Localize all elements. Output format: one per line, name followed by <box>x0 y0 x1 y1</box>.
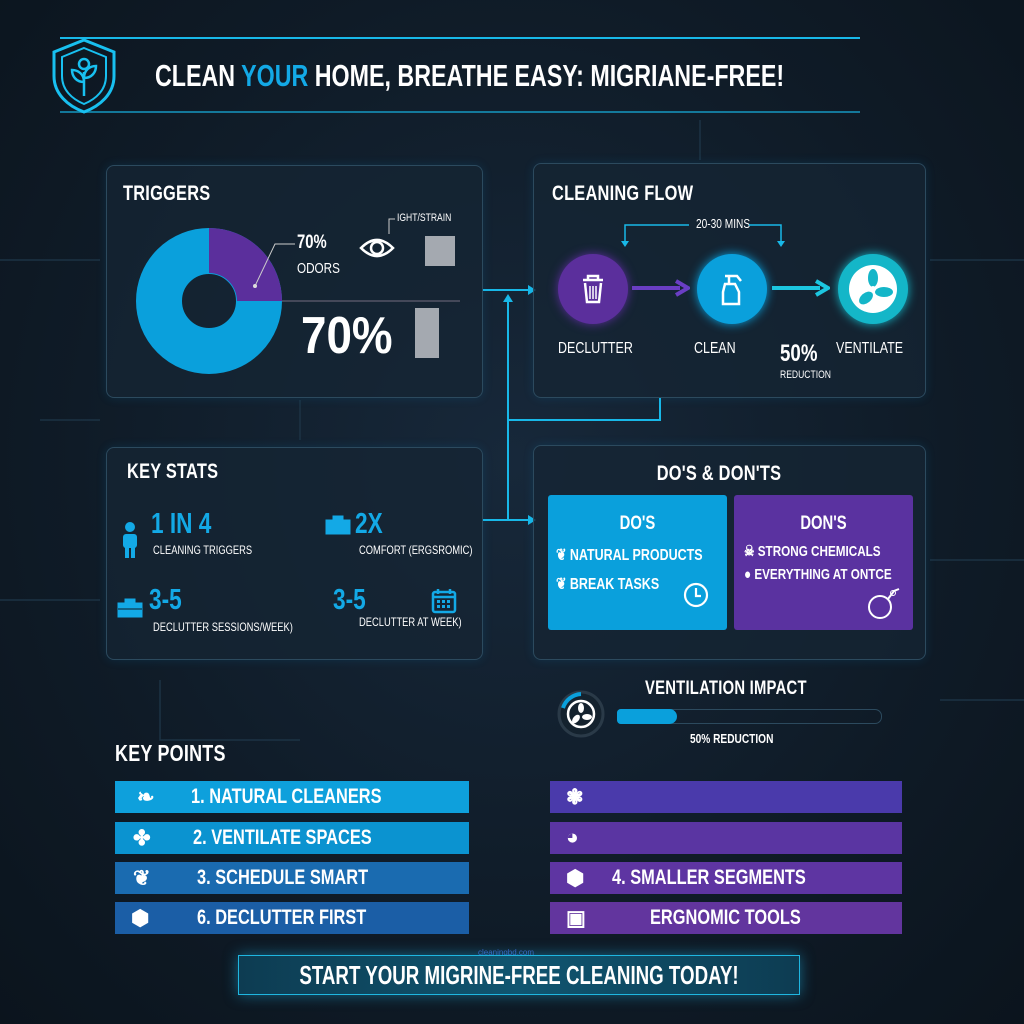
label: light/strain: IGHT/STRAIN <box>397 212 451 224</box>
panel: cleaning flow: REDUCTION <box>780 369 831 381</box>
donut chart <box>136 228 460 374</box>
ventilation impact: VENTILATION IMPACT <box>645 678 807 699</box>
arrow <box>772 279 830 297</box>
panel: cleaning flow: VENTILATE <box>836 340 903 357</box>
panel: cleaning flow: 50% <box>780 340 817 367</box>
key points list left: 2. VENTILATE SPACES <box>193 826 372 849</box>
box: do's: DO'S <box>620 513 655 534</box>
progress bar <box>617 709 882 724</box>
box: do's <box>548 495 727 630</box>
icon: fan gauge <box>558 690 604 738</box>
key points list right: ❃ <box>566 786 584 808</box>
stat: 2x: COMFORT (ERGSROMIC) <box>359 543 473 557</box>
panel: triggers: ODORS <box>297 260 340 277</box>
key points list right <box>550 781 902 934</box>
icon: clock <box>684 582 708 608</box>
key points list left: ❦ <box>133 866 151 890</box>
box: don'ts: ☠ STRONG CHEMICALS <box>744 543 881 560</box>
big stat: 70% <box>301 307 393 365</box>
key points list left: 1. NATURAL CLEANERS <box>191 785 382 808</box>
key points list left <box>115 781 469 934</box>
box: do's: ❦ BREAK TASKS <box>556 576 659 593</box>
ventilation impact: 50% REDUCTION <box>690 731 773 746</box>
labels: DECLUTTER <box>558 340 633 357</box>
key points list right: ◕ <box>566 826 579 849</box>
stat: 2x <box>326 508 473 557</box>
key points list right: 4. SMALLER SEGMENTS <box>612 866 806 889</box>
heading: triggers: TRIGGERS <box>123 182 210 205</box>
step: ventilate <box>838 254 908 324</box>
stat: 3-5 week: DECLUTTER AT WEEK) <box>359 615 462 629</box>
panel: cleaning flow <box>533 163 926 398</box>
timer label: 20-30 MINS <box>696 216 750 231</box>
stat: 2x: 2X <box>355 508 383 540</box>
step: declutter <box>558 254 628 324</box>
key points list right: ▣ <box>566 906 586 930</box>
box: don'ts: ● EVERYTHING AT ONTCE <box>744 566 892 583</box>
heading: DO'S & DON'TS <box>657 462 781 485</box>
panel: key stats <box>106 447 483 660</box>
key points list left: ⬢ <box>131 906 149 930</box>
stat: 1 in 4 <box>123 508 252 558</box>
step: clean <box>697 254 767 324</box>
call to action banner <box>238 955 800 995</box>
stat: 3-5 sessions: DECLUTTER SESSIONS/WEEK) <box>153 620 293 634</box>
icon: bomb <box>868 588 900 619</box>
key points list left: ✤ <box>133 826 151 850</box>
stat: 3-5 week <box>333 584 462 629</box>
key points list left: 3. SCHEDULE SMART <box>197 866 368 889</box>
ventilation impact <box>558 678 882 746</box>
stat: 3-5 sessions <box>118 584 293 634</box>
icon: eye <box>359 238 395 258</box>
box: do's: ❦ NATURAL PRODUCTS <box>556 547 703 564</box>
arrow <box>632 279 690 297</box>
heading: cleaning flow: CLEANING FLOW <box>552 182 693 205</box>
panel: do's and don'ts <box>533 445 926 660</box>
box: don'ts: DON'S <box>800 513 847 534</box>
key points list right: ⬢ <box>566 866 584 890</box>
heading: key points: KEY POINTS <box>115 740 226 766</box>
panel: cleaning flow: CLEAN <box>694 340 736 357</box>
box: don'ts <box>734 495 913 630</box>
stat: 1 in 4: 1 IN 4 <box>151 508 211 540</box>
call to action banner: START YOUR MIGRINE-FREE CLEANING TODAY! <box>299 960 739 990</box>
callout: odors: 70% <box>297 232 327 253</box>
key points list right: ERGNOMIC TOOLS <box>650 906 801 929</box>
key points list left: ❧ <box>137 786 155 808</box>
stat: 3-5 sessions: 3-5 <box>149 584 182 616</box>
watermark: cleaningbd.com <box>478 948 534 957</box>
stat: 1 in 4: CLEANING TRIGGERS <box>153 543 252 557</box>
stat: 3-5 week: 3-5 <box>333 584 366 616</box>
panel: triggers <box>106 165 483 398</box>
title: CLEAN YOUR HOME, BREATHE EASY: MIGRIANE-FREE! <box>155 58 784 93</box>
heading: key stats: KEY STATS <box>127 460 218 483</box>
key points list left: 6. DECLUTTER FIRST <box>197 906 366 929</box>
icon: shield <box>52 39 116 114</box>
